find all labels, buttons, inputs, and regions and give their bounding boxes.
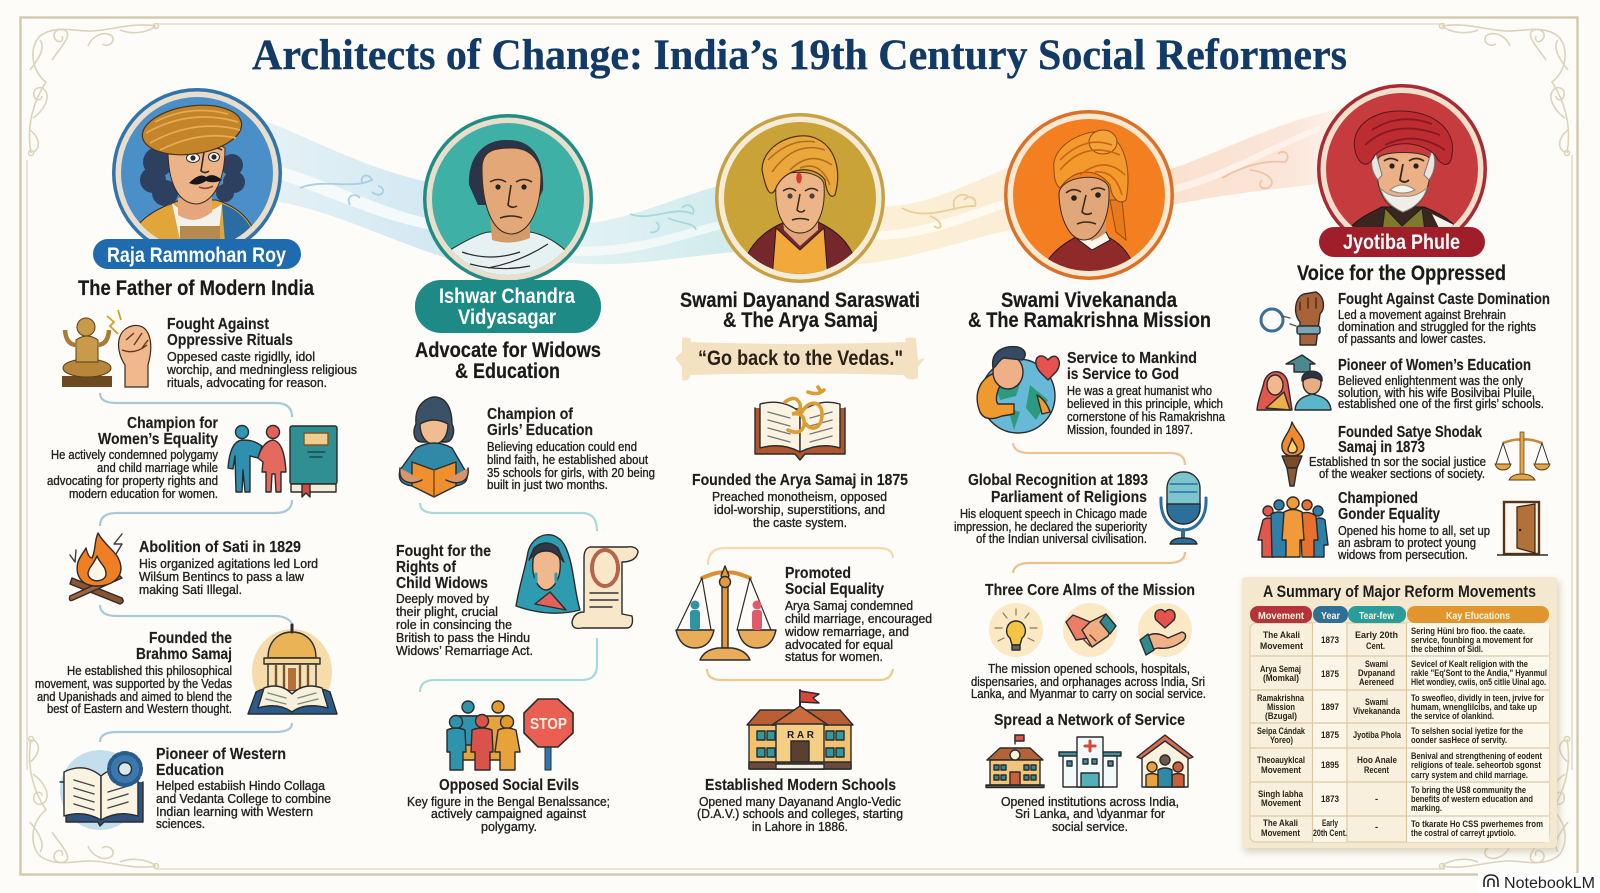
table row 4: Jyotiba Phola [1353,730,1402,740]
text: Established Modern Schools: Opened many Dayanand Anglo-Vedic [699,794,901,809]
text: mission body: Lanka, and Myanmar to carry on social service. [971,686,1206,701]
heading: Advocate for Widows & Education: Advocate for Widows [415,339,601,362]
text: Founded the Brahmo Samaj: movement, was supported by the Vedas [35,676,232,691]
icon: fist and broken handcuff [1261,292,1323,345]
icon: couple with school house [1257,355,1331,410]
text: Pioneer of Western Education: Education [156,762,224,779]
table body cells [1250,623,1549,842]
text: Promoted Social Equality [784,565,932,664]
table row 3 [1257,693,1544,721]
icon: fire and logs [69,533,123,604]
name badge: Ishwar Chandra Vidyasagar: Ishwar Chandra [439,285,575,308]
text: Pioneer of Women's Education: Believed enlightenment was the only [1338,373,1523,388]
text: Founded the Arya Samaj in 1875: Preached monotheism, opposed [712,489,887,504]
text: Champion of Girls' Education: built in just two months. [487,477,608,492]
icon: school building [747,690,853,769]
table row 5: Recent [1364,765,1389,775]
table row 2: Sevicel of Kealt religion with the [1411,659,1528,669]
icons: school, hospital, home [986,735,1193,788]
table row 6 [1258,785,1533,813]
text: Founded Satye Shodak Samaj in 1873: Samaj in 1873 [1338,439,1425,456]
text: Champion of Girls' Education: Believing education could end [487,439,637,454]
text: Fought Against Caste Domination [1338,291,1550,346]
table row 2: Aereneed [1359,677,1394,687]
name badge: Raja Rammohan Roy [93,239,301,269]
table row 3: the service of olankind. [1411,711,1494,721]
text: Opposed Social Evils: polygamy. [481,819,537,834]
text: Opposed Social Evils: Opposed Social Evils [439,777,579,794]
summary table card [1242,577,1559,852]
table row 1 [1260,626,1533,654]
text: Championed Gonder Equality: an asbram to protect young [1338,535,1476,550]
portrait: Swami Vivekananda [1004,110,1174,280]
heading: Voice for the Oppressed: Voice for the Oppressed [1297,262,1506,285]
text: Founded the Brahmo Samaj: Founded the [149,630,232,647]
quote banner: Go back to the Vedas: “Go back to the Vedas." [698,347,903,370]
text: Championed Gonder Equality: Gonder Equality [1338,506,1440,523]
text: Promoted Social Equality: Arya Samaj condemned [785,598,913,613]
quote banner: Go back to the Vedas [675,338,925,380]
text: Fought Against Oppressive Rituals: worchip, and medningless religious [166,362,357,377]
table row 1: Sering Hüni bro fioo. the caate. [1411,626,1525,636]
text: Champion of Girls' Education: Girls’ Education [487,422,593,439]
table row 7: 20th Cent. [1313,828,1347,838]
text: Founded the Brahmo Samaj: and Upanishads and aimed to blend the [37,689,232,704]
heading: Swami Dayanand Saraswati & The Arya Samaj: & The Arya Samaj [723,309,878,332]
table row 2: Hlet wondiey, cwiis, on5 citlie Uinal ago. [1411,677,1546,687]
icon: weeping widow and scroll [516,535,638,628]
icon: people and stop sign [447,699,573,770]
text: Opened institutions: Opened institutions across India, [1001,794,1179,809]
text: Established Modern Schools [697,777,903,834]
table row 3: Vivekananda [1353,706,1401,716]
text: Fought for the Rights of Child Widows [396,543,533,658]
text: Promoted Social Equality: Promoted [785,565,851,582]
icon: open book with gear [60,750,143,830]
text: Founded the Arya Samaj in 1875 [692,472,908,530]
text: Global Recognition at 1893 Parliament of Religions [954,472,1148,546]
table row 4: 1875 [1321,730,1340,741]
text: Global Recognition at 1893 Parliament of Religions: His eloquent speech in Chicago made [960,506,1147,521]
table row 2: Swami [1365,659,1388,669]
portrait: Swami Dayanand Saraswati [715,113,885,283]
table row 6: marking. [1411,803,1442,813]
text: Founded the Arya Samaj in 1875: idol-worship, superstitions, and [714,502,885,517]
text: Champion for Women's Equality: advocating for property rights and [47,473,218,488]
text: mission body: dispensaries, and orphanages across India, Sri [971,674,1205,689]
column 2: Ishwar Chandra Vidyasagar [396,114,655,834]
text: Abolition of Sati in 1829 [139,539,318,597]
text: Fought for the Rights of Child Widows: Widows’ Remarriage Act. [396,643,533,658]
text: Pioneer of Western Education: Indian learning with Western [156,804,313,819]
text: mission body: The mission opened schools, hospitals, [988,661,1190,676]
text: mission body [971,661,1206,701]
text: Fought Against Oppressive Rituals [166,316,357,390]
text: Service to Mankind is Service to God: cornerstone of his Ramakrishna [1067,409,1226,424]
text: Fought for the Rights of Child Widows: role in consincing the [396,617,512,632]
text: Pioneer of Women's Education: solution, with his wife Bosilvibai Pluile, [1338,385,1535,400]
table row 6: - [1375,794,1378,805]
table header: Movement [1258,610,1304,622]
table row 4 [1257,726,1523,745]
text: Champion for Women's Equality: He actively condemned polygamy [51,447,218,462]
text: Pioneer of Western Education: sciences. [156,816,205,831]
table row 5 [1257,751,1542,780]
table header [1250,606,1549,623]
text: Service to Mankind is Service to God: is Service to God [1067,366,1179,383]
text: Champion of Girls' Education: Champion of [487,406,574,423]
text: Abolition of Sati in 1829: Abolition of Sati in 1829 [139,539,301,556]
icon: people and stop sign: STOP [530,716,567,733]
table row 5: carry system and child marriage. [1411,770,1528,780]
table row 2 [1260,659,1547,687]
icons: bulb, handshake, hand with heart [989,603,1192,657]
name badge: Ishwar Chandra Vidyasagar: Vidyasagar [458,306,556,329]
table row 1: Cent. [1366,641,1385,652]
text: Fought Against Oppressive Rituals: rituals, advocating for reason. [167,375,327,390]
text: Fought for the Rights of Child Widows: their plight, crucial [396,604,498,619]
text: Promoted Social Equality: status for women. [785,649,883,664]
table row 7: The Akali [1263,818,1298,828]
text: Fought for the Rights of Child Widows: Fought for the [396,543,491,560]
text: Service to Mankind is Service to God: He was a great humanist who [1067,383,1212,398]
icon: scales with man and woman [676,566,776,660]
text: Abolition of Sati in 1829: Wilśum Bentincs to pass a law [139,569,305,584]
table row 2: Dvpanand [1358,668,1395,678]
icon: scales of justice [1495,432,1550,480]
flowing ribbons between portraits [250,105,1355,265]
text: Opened institutions: social service. [1052,819,1128,834]
title: Architects of Change: India’s 19th Century Social Reformers [252,32,1347,79]
table row 4: Seipa Cándak [1257,726,1306,736]
text: Pioneer of Western Education: Helped estabiish Hindo Collaga [156,778,326,793]
portrait: Raja Rammohan Roy [112,88,282,239]
heading: Swami Dayanand Saraswati & The Arya Samaj: Swami Dayanand Saraswati [680,289,920,312]
table row 5: Hoo Anale [1357,755,1397,765]
name badge: Ishwar Chandra Vidyasagar [415,280,601,333]
heading: Swami Vivekananda & The Ramakrishna Mission: & The Ramakrishna Mission [968,309,1211,332]
text: Championed Gonder Equality: widows from persecution. [1337,547,1468,562]
text: Fought Against Caste Domination: Led a movement against Brehɍain [1338,307,1506,322]
text: Champion for Women's Equality: Champion for [127,415,218,432]
heading: The Father of Modern India: The Father of Modern India [78,277,314,300]
icon: couple and book [228,426,337,497]
table row 1: the cbethinn of Sidl. [1411,644,1483,654]
icon: girl reading [399,397,468,497]
name badge: Jyotiba Phule [1319,227,1485,257]
table row 7: the costral of carreyt ɟpvtiolo. [1411,828,1516,838]
text: Service to Mankind is Service to God: Service to Mankind [1067,350,1197,367]
table header: Kay Efucations [1446,610,1510,622]
text: Championed Gonder Equality: Opened his home to all, set up [1338,523,1490,538]
table row 3: Mission [1267,702,1295,712]
text: Promoted Social Equality: Social Equality [785,581,884,598]
table row 6: Singh Iabha [1258,789,1304,799]
table row 1: 1873 [1321,635,1339,646]
table title: A Summary of Major Reform Movements [1263,582,1536,601]
table row 3: Swami [1365,697,1388,707]
text: Fought for the Rights of Child Widows: British to pass the Hindu [396,630,530,645]
text: Opposed Social Evils: Key figure in the Bengal Benalssance; [407,794,610,809]
text: Fought Against Oppressive Rituals: Oppressive Rituals [167,332,293,349]
heading: Swami Dayanand Saraswati & The Arya Samaj [680,289,920,332]
text: Pioneer of Western Education [156,746,331,831]
text: Champion for Women's Equality: modern education for women. [69,486,218,501]
text: Pioneer of Women's Education: established one of the first girls’ schools. [1338,396,1544,411]
icon: book with Om [755,387,845,460]
column 3: Swami Dayanand Saraswati [675,113,932,834]
table row 3: 1897 [1321,702,1339,713]
icon: open door [1497,502,1548,555]
text: Established Modern Schools: Established Modern Schools [705,777,896,794]
icon: microphone [1161,472,1206,544]
column 1: Raja Rammohan Roy [35,88,357,831]
heading: Three Core Aims: Three Core Alms of the Mission [985,582,1195,599]
NotebookLM watermark: NotebookLM [1504,875,1595,892]
text: Championed Gonder Equality [1337,490,1490,562]
text: Fought for the Rights of Child Widows: Rights of [396,559,457,576]
table row 4: Yoreo) [1270,735,1293,745]
column 5: Jyotiba Phule [1257,84,1550,562]
table row 3: To sweofleo, dividly in teen, jrvive for [1411,693,1544,703]
table row 7: To tkarate Ho CSS pwerhemes from [1411,819,1543,829]
table row 7 [1261,818,1543,838]
heading: Spread a Network of Service: Spread a Network of Service [994,712,1185,729]
text: Promoted Social Equality: child marriage, encouraged [785,611,932,626]
text: Founded Satye Shodak Samaj in 1873 [1309,424,1486,481]
table row 1: Early 20th [1355,630,1398,641]
text: Promoted Social Equality: widow remarriage, and [784,624,909,639]
text: Service to Mankind is Service to God: Mission, founded in 1897. [1067,422,1193,437]
text: Founded Satye Shodak Samaj in 1873: of the weaker sections of society. [1319,466,1485,481]
table row 2: Arya Semaj [1260,664,1301,674]
text: Fought Against Caste Domination: domination and struggled for the rights [1338,319,1536,334]
text: Abolition of Sati in 1829: His organized agitations led Lord [139,556,318,571]
table row 2: 1875 [1321,669,1340,680]
icon: group of people [1258,497,1328,557]
text: Opened institutions [1001,794,1179,834]
text: Founded the Arya Samaj in 1875: the caste system. [753,515,847,530]
table row 7: Early [1322,818,1338,828]
text: Pioneer of Western Education: and Vedanta College to combine [156,791,331,806]
text: Fought for the Rights of Child Widows: Child Widows [396,575,488,592]
text: Promoted Social Equality: advocated for equal [785,637,893,652]
icon: school building: RAR [787,730,815,741]
table row 5: Theoauyklcal [1257,755,1305,765]
table row 1: The Akali [1263,630,1300,641]
text: Founded the Brahmo Samaj: Brahmo Samaj [136,646,232,663]
table row 2: rakle "Eq'Sont to the Andia," Hyanmul [1411,668,1547,678]
column 4: Swami Vivekananda [954,110,1226,834]
text: Fought Against Caste Domination: of passants and lower castes. [1338,331,1486,346]
icon: temple dome on open book [248,625,337,715]
table row 3: humam, wnenglilcibs, and take up [1411,702,1537,712]
table row 3: Ramakrishna [1257,693,1305,703]
table row 7: Movement [1261,828,1300,838]
text: Founded Satye Shodak Samaj in 1873: Founded Satye Shodak [1338,424,1482,441]
heading: Advocate for Widows & Education [415,339,601,383]
text: Founded the Arya Samaj in 1875: Founded the Arya Samaj in 1875 [692,472,908,489]
text: Founded the Brahmo Samaj [35,630,232,716]
heading: Advocate for Widows & Education: & Education [455,360,560,383]
heading: Swami Vivekananda & The Ramakrishna Mission [968,289,1211,332]
text: Champion of Girls' Education [487,406,655,492]
table row 5: Benival and strengthening of eodent [1411,751,1542,761]
text: Service to Mankind is Service to God: believed in this principle, which [1067,396,1223,411]
table row 1: service, founbing a movement for [1411,635,1533,645]
table row 6: To bring the US8 community the [1411,785,1526,795]
text: Founded the Brahmo Samaj: best of Eastern and Western thought. [47,701,232,716]
text: Founded the Brahmo Samaj: He established this philosophical [67,663,232,678]
text: Service to Mankind is Service to God [1067,350,1226,437]
portrait: Jyotiba Phule [1317,84,1487,227]
text: Global Recognition at 1893 Parliament of Religions: Global Recognition at 1893 [968,472,1148,489]
icon: torch [1282,422,1304,486]
text: Global Recognition at 1893 Parliament of Religions: Parliament of Religions [991,489,1147,506]
name badge: Jyotiba Phule: Jyotiba Phule [1343,231,1460,254]
icon: idol and fist [62,310,151,387]
table header: Year [1321,610,1340,622]
table row 6: 1873 [1321,794,1339,805]
table row 4: oonder sasHece of servity. [1411,735,1507,745]
text: Fought for the Rights of Child Widows: Deeply moved by [396,591,489,606]
text: Abolition of Sati in 1829: making Sati Illegal. [139,582,242,597]
table row 6: benefits of western education and [1411,794,1533,804]
text: Champion for Women's Equality: and child marriage while [97,460,218,475]
text: Pioneer of Women's Education: Pioneer of Women’s Education [1338,357,1531,374]
text: Established Modern Schools: in Lahore in 1886. [752,819,848,834]
text: Fought Against Oppressive Rituals: Oppesed caste rigidlly, idol [167,349,315,364]
text: Global Recognition at 1893 Parliament of Religions: of the Indian universal civilisation. [976,531,1147,546]
text: Fought Against Caste Domination: Fought Against Caste Domination [1338,291,1550,308]
text: Global Recognition at 1893 Parliament of Religions: impression, he declared the superiority [954,519,1147,534]
text: Champion of Girls' Education: 35 schools for girls, with 20 being [487,465,655,480]
table row 4: To selshen social iyetize for the [1411,726,1523,736]
text: Pioneer of Western Education: Pioneer of Western [156,746,286,763]
table row 2: (Momkal) [1263,673,1299,683]
table row 1: Movement [1260,641,1304,652]
text: Championed Gonder Equality: Championed [1338,490,1418,507]
table header: Tear-few [1359,610,1395,622]
text: Founded Satye Shodak Samaj in 1873: Established tn sor the social justice [1309,454,1486,469]
table row 7: - [1375,822,1378,833]
table row 6: Movement [1261,798,1301,808]
text: Champion for Women's Equality: Women’s Equality [98,431,218,448]
table row 5: 1895 [1321,760,1340,771]
heading: Swami Vivekananda & The Ramakrishna Mission: Swami Vivekananda [1001,289,1177,312]
NotebookLM watermark [1478,873,1600,893]
icon: person hugging globe with heart [977,347,1059,433]
text: Fought Against Oppressive Rituals: Fought Against [167,316,269,333]
name badge: Raja Rammohan Roy: Raja Rammohan Roy [107,244,286,267]
table row 5: religions of teale. seheortob sgonst [1411,760,1541,770]
table row 3: (Bzugal) [1265,711,1297,721]
text: Champion for Women's Equality [47,415,218,501]
table row 5: Movement [1261,765,1301,775]
text: Opened institutions: Sri Lanka, and \dyanmar for [1015,806,1166,821]
text: Opposed Social Evils: actively campaigned against [431,806,586,821]
text: Established Modern Schools: (D.A.V.) schools and colleges, starting [697,806,903,821]
portrait: Ishwar Chandra Vidyasagar [423,114,593,285]
text: Champion of Girls' Education: blind faith, he established about [487,452,648,467]
text: Pioneer of Women's Education [1338,357,1544,411]
text: Opposed Social Evils [407,777,610,834]
